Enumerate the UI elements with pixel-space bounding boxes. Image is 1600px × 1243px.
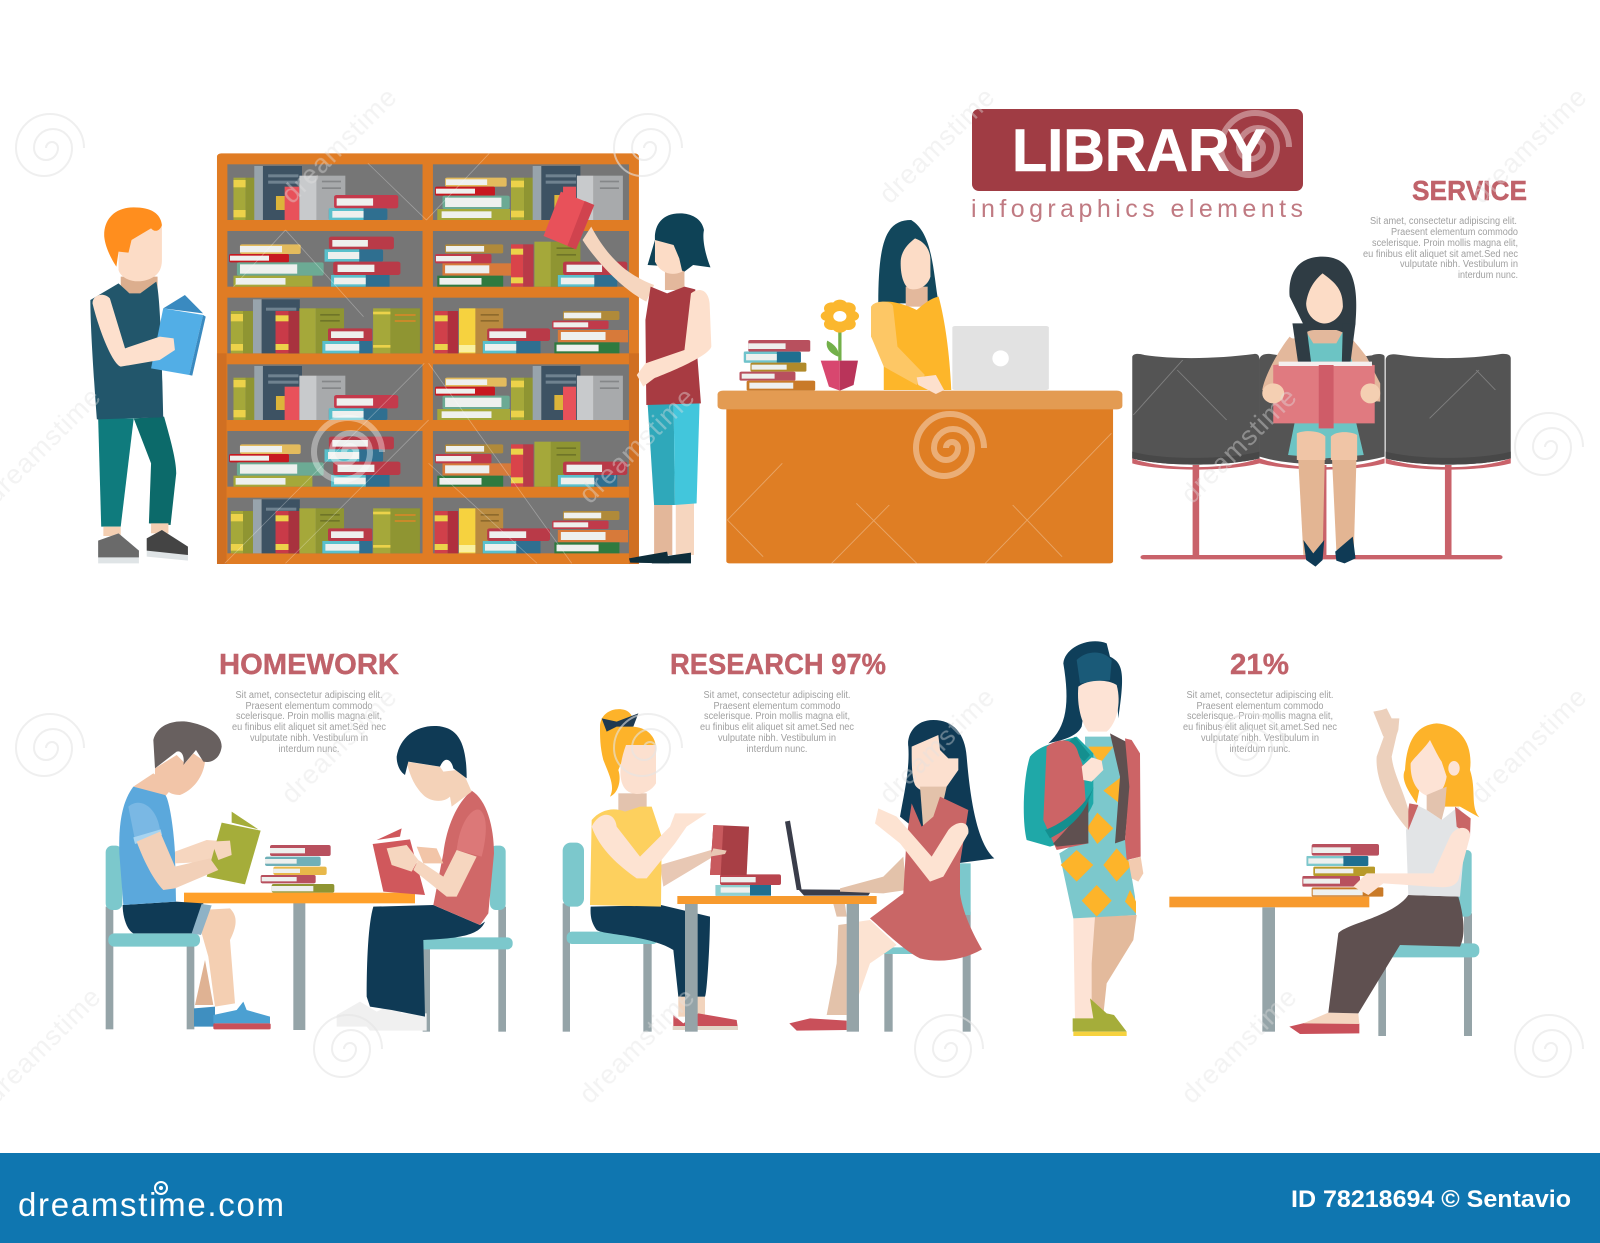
text block: 21%: scelerisque. Proin mollis magna elit, [1187, 711, 1333, 722]
text block: research: Praesent elementum commodo [714, 701, 841, 712]
text block: research: vulputate nibh. Vestibulum in [718, 733, 836, 744]
text block: research: scelerisque. Proin mollis magna elit, [704, 711, 850, 722]
text block: service: interdum nunc. [1458, 270, 1518, 281]
text block: homework: scelerisque. Proin mollis magna elit, [236, 711, 382, 722]
text block: homework: Praesent elementum commodo [246, 701, 373, 712]
laptop [952, 326, 1049, 390]
flower pot [821, 300, 859, 391]
text block: service: scelerisque. Proin mollis magna elit, [1372, 238, 1518, 249]
heading: service: SERVICE [1412, 175, 1527, 206]
footer logo: dreamstime.com [18, 1186, 284, 1223]
watermark text: dreamstime [1465, 681, 1593, 809]
text block: service [1363, 216, 1518, 281]
waiting chairs [1132, 354, 1511, 559]
text block: homework: eu finibus elit aliquet sit amet.Sed nec [232, 722, 386, 733]
text block: 21%: Praesent elementum commodo [1196, 701, 1324, 712]
reception desk [718, 391, 1122, 563]
person: girl in red dress [789, 720, 994, 1032]
shelf books right column [435, 166, 628, 553]
person: boy in blue shirt [119, 721, 271, 1029]
text block: 21%: Sit amet, consectetur adipiscing elit. [1186, 690, 1334, 701]
text block: service: Sit amet, consectetur adipiscing elit. [1370, 216, 1517, 227]
text block: research [700, 690, 854, 755]
watermark spirals on white [16, 114, 1583, 1077]
person: standing girl with backpack [1024, 641, 1143, 1036]
text block: 21%: interdum nunc. [1230, 744, 1290, 755]
text block: service: eu finibus elit aliquet sit amet.Sed nec [1363, 249, 1518, 260]
text block: 21%: eu finibus elit aliquet sit amet.Sed nec [1183, 722, 1337, 733]
book stack on desk [739, 340, 815, 391]
person: boy in red shirt [337, 726, 494, 1031]
research chairs [563, 843, 971, 1032]
watermark text: dreamstime [1175, 981, 1303, 1109]
person: boy reading with blue book [90, 207, 206, 563]
footer image id: ID 78218694 © Sentavio [1291, 1186, 1571, 1213]
person: woman reaching to shelf [544, 192, 711, 563]
watermark text: dreamstime [275, 681, 403, 809]
person: girl in yellow top [590, 709, 738, 1030]
heading: homework: HOMEWORK [219, 649, 399, 681]
watermark text: dreamstime [873, 81, 1001, 209]
text block: research: Sit amet, consectetur adipiscing elit. [704, 690, 850, 701]
text block: service: vulputate nibh. Vestibulum in [1400, 259, 1518, 270]
heading: research: RESEARCH 97% [670, 649, 886, 681]
watermark text: dreamstime [573, 381, 701, 509]
watermark text: dreamstime [1465, 81, 1593, 209]
panel: research [563, 649, 994, 1032]
watermark text: dreamstime [573, 981, 701, 1109]
person: girl raising hand [1289, 708, 1479, 1034]
text block: homework: Sit amet, consectetur adipiscing elit. [236, 690, 382, 701]
research table with books and laptop [677, 821, 877, 1032]
title: LIBRARY banner: LIBRARY [1012, 117, 1266, 184]
panel: homework [106, 649, 513, 1032]
text block: 21% [1183, 690, 1337, 755]
homework table and chairs [106, 846, 513, 1032]
watermark text: dreamstime [1175, 381, 1303, 509]
watermark spirals on artwork [314, 113, 1289, 480]
book stack on table [261, 845, 334, 893]
footer band [0, 1153, 1600, 1243]
watermark text: dreamstime [275, 81, 403, 209]
subtitle: infographics elements [971, 195, 1303, 223]
table with book stack [1169, 844, 1383, 1032]
watermark text: dreamstime [873, 681, 1001, 809]
text block: homework: interdum nunc. [278, 744, 340, 755]
person: woman seated reading [1262, 257, 1380, 567]
chair [1377, 850, 1479, 1036]
bookcase [217, 153, 639, 564]
shelf books left column [229, 166, 420, 553]
heading: 21%: 21% [1230, 649, 1289, 681]
text block: 21%: vulputate nibh. Vestibulum in [1201, 733, 1319, 744]
text block: homework: vulputate nibh. Vestibulum in [250, 733, 368, 744]
text block: research: eu finibus elit aliquet sit amet.Sed nec [700, 722, 854, 733]
person: librarian [871, 220, 951, 394]
text block: service: Praesent elementum commodo [1391, 227, 1518, 238]
text block: homework [232, 690, 386, 755]
panel: 21% [1024, 641, 1479, 1036]
title: LIBRARY banner [972, 109, 1303, 191]
text block: research: interdum nunc. [746, 744, 808, 755]
